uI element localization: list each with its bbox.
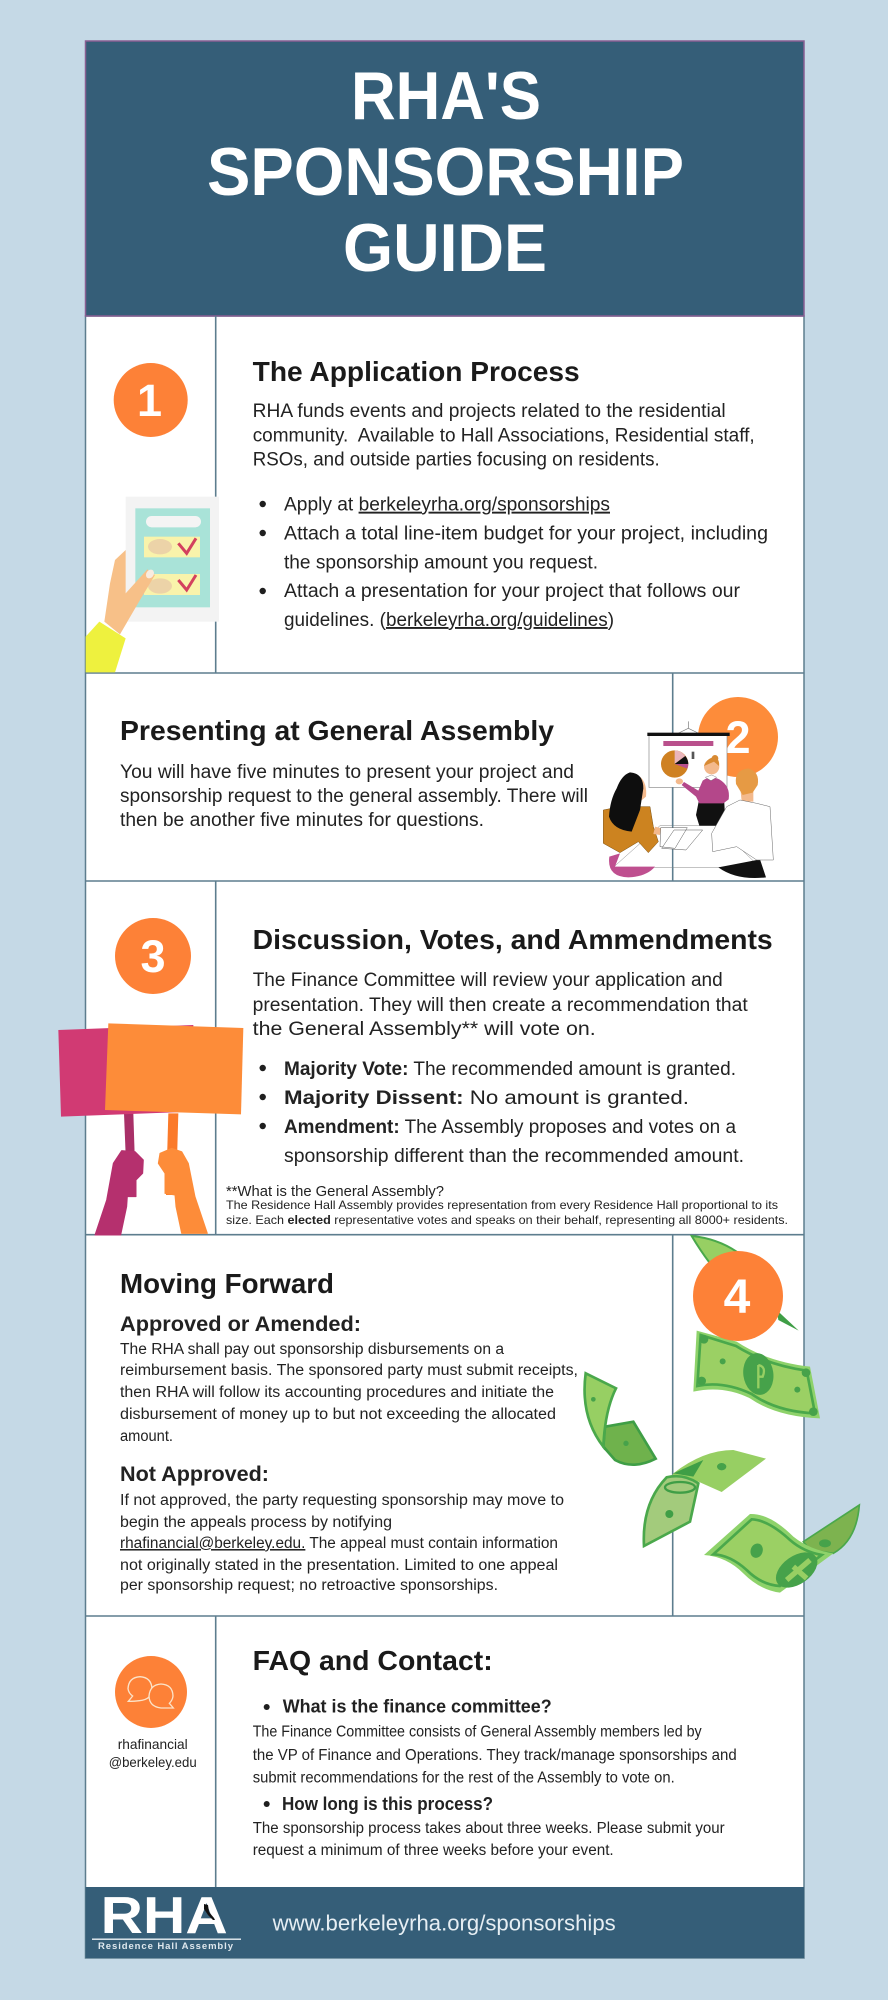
block: not approved	[120, 1462, 564, 1594]
icon: number 3: 3	[140, 931, 166, 982]
bullet list: Majority Dissent: No amount is granted.	[284, 1088, 689, 1109]
panel: step 3 discussion	[58, 918, 788, 1235]
contact email	[109, 1736, 197, 1770]
heading: Presenting at General Assembly	[120, 715, 555, 746]
footnote: **What is the General Assembly?	[226, 1184, 444, 1200]
heading: FAQ and Contact:	[253, 1645, 493, 1676]
icon: chat bubbles	[115, 1656, 187, 1728]
block: not approved: begin the appeals process by notifying	[120, 1514, 392, 1531]
bullet list: Apply at berkeleyrha.org/sponsorships	[284, 495, 610, 516]
intro text: community. Available to Hall Associations, Residential staff,	[253, 426, 755, 447]
block: approved or amended: amount.	[120, 1428, 173, 1445]
block: approved or amended: Approved or Amended:	[120, 1312, 361, 1336]
bullet list: guidelines. (berkeleyrha.org/guidelines)	[284, 610, 614, 631]
icon: number 4: 4	[724, 1271, 751, 1324]
body text: sponsorship request to the general assembly. There will	[120, 786, 588, 807]
RHA logo: Residence Hall Assembly	[98, 1941, 234, 1952]
FAQ item: finance committee: The Finance Committee consists of General Assembly members led by	[253, 1724, 702, 1741]
illustration: raised signs	[58, 1023, 243, 1235]
panel: step 1 application process	[86, 356, 768, 672]
bullet list: sponsorship different than the recommended amount.	[284, 1146, 744, 1167]
FAQ item: process length: request a minimum of three weeks before your event.	[253, 1842, 614, 1859]
bullet list: Majority Vote: The recommended amount is granted.	[284, 1059, 736, 1080]
intro text: RSOs, and outside parties focusing on residents.	[253, 450, 660, 471]
heading: Moving Forward	[120, 1268, 334, 1299]
bullet list	[260, 1059, 744, 1167]
RHA logo: RHA	[101, 1887, 228, 1945]
FAQ item: finance committee: the VP of Finance and Operations. They track/manage sponsorships and	[253, 1747, 737, 1764]
bullet list: Amendment: The Assembly proposes and votes on a	[284, 1117, 736, 1138]
FAQ item: process length: The sponsorship process takes about three weeks. Please submit your	[253, 1820, 725, 1837]
block: approved or amended	[120, 1312, 578, 1445]
block: not approved: not originally stated in the presentation. Limited to one appeal	[120, 1557, 558, 1574]
footnote: The Residence Hall Assembly provides representation from every Residence Hall proportional to its	[226, 1198, 778, 1212]
heading: The Application Process	[253, 356, 580, 387]
intro text	[253, 401, 755, 471]
bullet list	[260, 495, 768, 631]
panel: step 2 presenting	[120, 697, 778, 878]
FAQ item: finance committee: submit recommendations for the rest of the Assembly to vote on.	[253, 1770, 675, 1787]
FAQ item: finance committee	[253, 1697, 737, 1787]
website URL: www.berkeleyrha.org/sponsorships	[272, 1911, 616, 1936]
block: approved or amended: then RHA will follow its accounting procedures and initiate the	[120, 1384, 554, 1401]
panel: page card	[86, 316, 804, 1958]
intro text: presentation. They will then create a recommendation that	[253, 995, 748, 1016]
intro text: the General Assembly** will vote on.	[253, 1019, 596, 1040]
contact email: rhafinancial	[118, 1736, 188, 1752]
panel: step 4 moving forward	[120, 1236, 859, 1595]
intro text: RHA funds events and projects related to the residential	[253, 401, 726, 422]
intro text: The Finance Committee will review your application and	[253, 970, 723, 991]
title: GUIDE	[343, 210, 547, 286]
footer band	[86, 1887, 804, 1958]
FAQ item: process length	[253, 1794, 725, 1859]
block: approved or amended: reimbursement basis. The sponsored party must submit receipts,	[120, 1362, 578, 1379]
header band	[86, 41, 804, 316]
body text: You will have five minutes to present your project and	[120, 762, 574, 783]
illustration: presentation meeting	[603, 721, 773, 878]
icon: number 2	[698, 697, 778, 777]
block: not approved: rhafinancial@berkeley.edu. The appeal must contain information	[120, 1535, 558, 1552]
block: not approved: Not Approved:	[120, 1462, 269, 1486]
icon: hand holding tablet	[86, 497, 219, 672]
bullet list: Attach a presentation for your project that follows our	[284, 581, 741, 602]
block: not approved: per sponsorship request; no retroactive sponsorships.	[120, 1577, 498, 1594]
panel: FAQ and contact	[109, 1645, 737, 1859]
icon: number 1: 1	[137, 375, 162, 426]
footnote: size. Each elected representative votes and speaks on their behalf, representing all 8000+ residents.	[226, 1213, 788, 1227]
title	[207, 58, 684, 286]
intro text	[253, 970, 748, 1040]
block: approved or amended: disbursement of money up to but not exceeding the allocated	[120, 1406, 556, 1423]
title: SPONSORSHIP	[207, 134, 684, 210]
icon: number 4	[693, 1251, 783, 1341]
icon: number 1	[114, 363, 188, 437]
footnote	[226, 1184, 788, 1227]
bullet list: the sponsorship amount you request.	[284, 553, 598, 574]
FAQ item: finance committee: What is the finance committee?	[283, 1697, 552, 1717]
heading: Discussion, Votes, and Ammendments	[253, 924, 773, 955]
contact email: @berkeley.edu	[109, 1754, 197, 1770]
title: RHA'S	[351, 58, 541, 134]
block: approved or amended: The RHA shall pay out sponsorship disbursements on a	[120, 1341, 504, 1358]
body text	[120, 762, 588, 831]
icon: number 3	[115, 918, 191, 994]
RHA logo	[92, 1887, 241, 1952]
icon: number 2: 2	[725, 712, 751, 763]
FAQ item: process length: How long is this process?	[282, 1794, 493, 1814]
illustration: flying money	[585, 1236, 859, 1595]
block: not approved: If not approved, the party requesting sponsorship may move to	[120, 1492, 564, 1509]
bullet list: Attach a total line-item budget for your project, including	[284, 523, 768, 544]
body text: then be another five minutes for questions.	[120, 810, 484, 831]
